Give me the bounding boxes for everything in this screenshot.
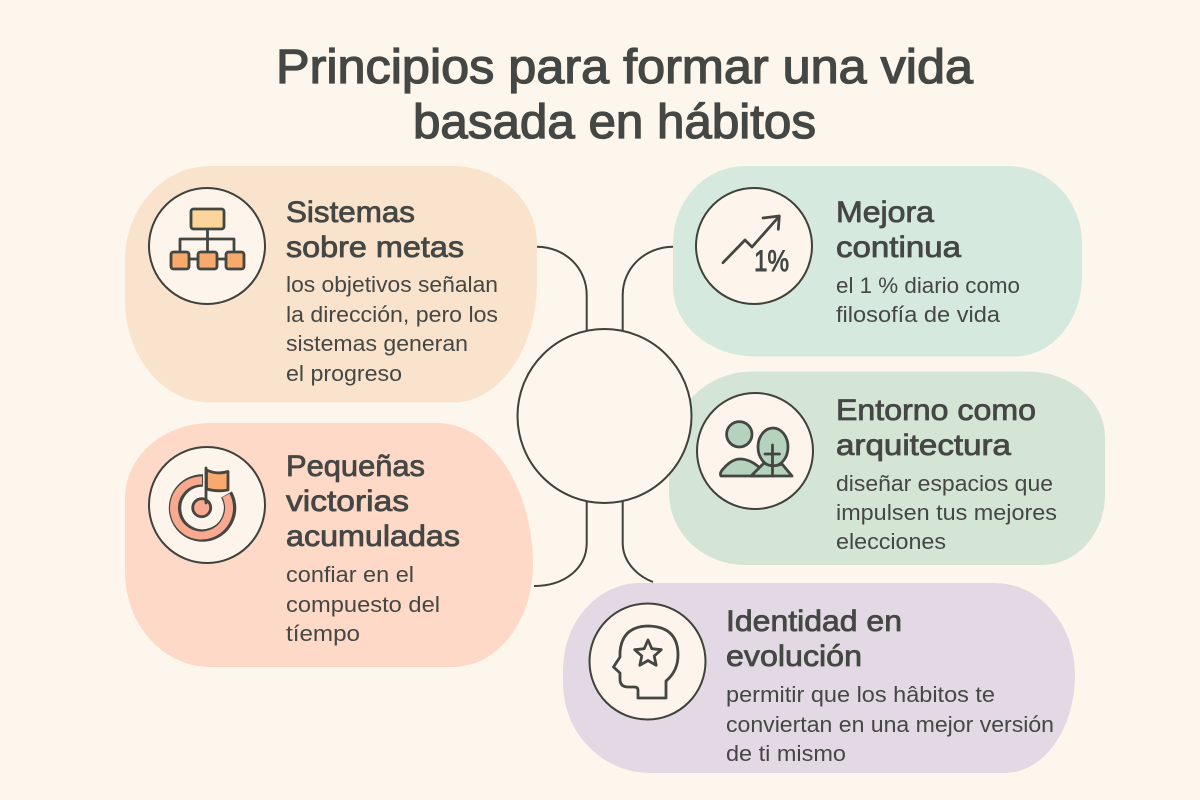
heading (726, 605, 902, 673)
connector lines (534, 247, 673, 586)
description: permitir que los hâbitos te (726, 682, 995, 707)
heading: acumuladas (286, 520, 460, 553)
icon: head with star (590, 604, 706, 720)
icon: person and tree (697, 393, 813, 509)
description: el 1 % diario como (836, 273, 1020, 298)
icon: rising arrow with 1%: 1% (754, 245, 789, 278)
title: basada en hábitos (413, 96, 816, 149)
description: filosofía de vida (836, 302, 1001, 327)
description: diseñar espacios que (836, 471, 1053, 496)
description (836, 471, 1057, 554)
panel: mejora continua (673, 166, 1082, 357)
description (286, 272, 498, 386)
description: el progreso (286, 361, 402, 386)
heading: Sistemas (286, 196, 415, 229)
description: compuesto del (286, 592, 440, 617)
description: confiar en el (286, 562, 414, 587)
description (836, 273, 1020, 327)
heading: continua (836, 231, 961, 264)
icon: hierarchy diagram (149, 188, 265, 304)
central circle (518, 329, 692, 503)
panel: identidad en evolución (563, 583, 1075, 773)
title: Principios para formar una vida (276, 41, 973, 94)
title (276, 41, 973, 149)
heading: arquitectura (836, 429, 1011, 462)
heading (836, 196, 961, 264)
icon: target with flag (149, 447, 265, 563)
description: sistemas generan (286, 331, 468, 356)
icon: rising arrow with 1% (696, 188, 812, 304)
heading: Pequeñas (286, 450, 425, 483)
description: elecciones (836, 529, 946, 554)
panel: pequeñas victorias acumuladas (125, 423, 533, 667)
panel: sistemas sobre metas (125, 166, 537, 402)
heading: sobre metas (286, 231, 464, 264)
heading (836, 394, 1036, 462)
description: los objetivos señalan (286, 272, 498, 297)
description: impulsen tus mejores (836, 500, 1057, 525)
heading: evolución (726, 640, 862, 673)
heading: Identidad en (726, 605, 902, 638)
description: tíempo (286, 621, 360, 646)
heading (286, 196, 464, 264)
description: la dirección, pero los (286, 302, 498, 327)
description: conviertan en una mejor versión (726, 712, 1054, 737)
panel: entorno como arquitectura (669, 371, 1105, 565)
description (286, 562, 440, 646)
heading: Entorno como (836, 394, 1036, 427)
heading: Mejora (836, 196, 934, 229)
description (726, 682, 1054, 766)
heading: victorias (286, 485, 409, 518)
heading (286, 450, 460, 553)
description: de ti mismo (726, 741, 846, 766)
